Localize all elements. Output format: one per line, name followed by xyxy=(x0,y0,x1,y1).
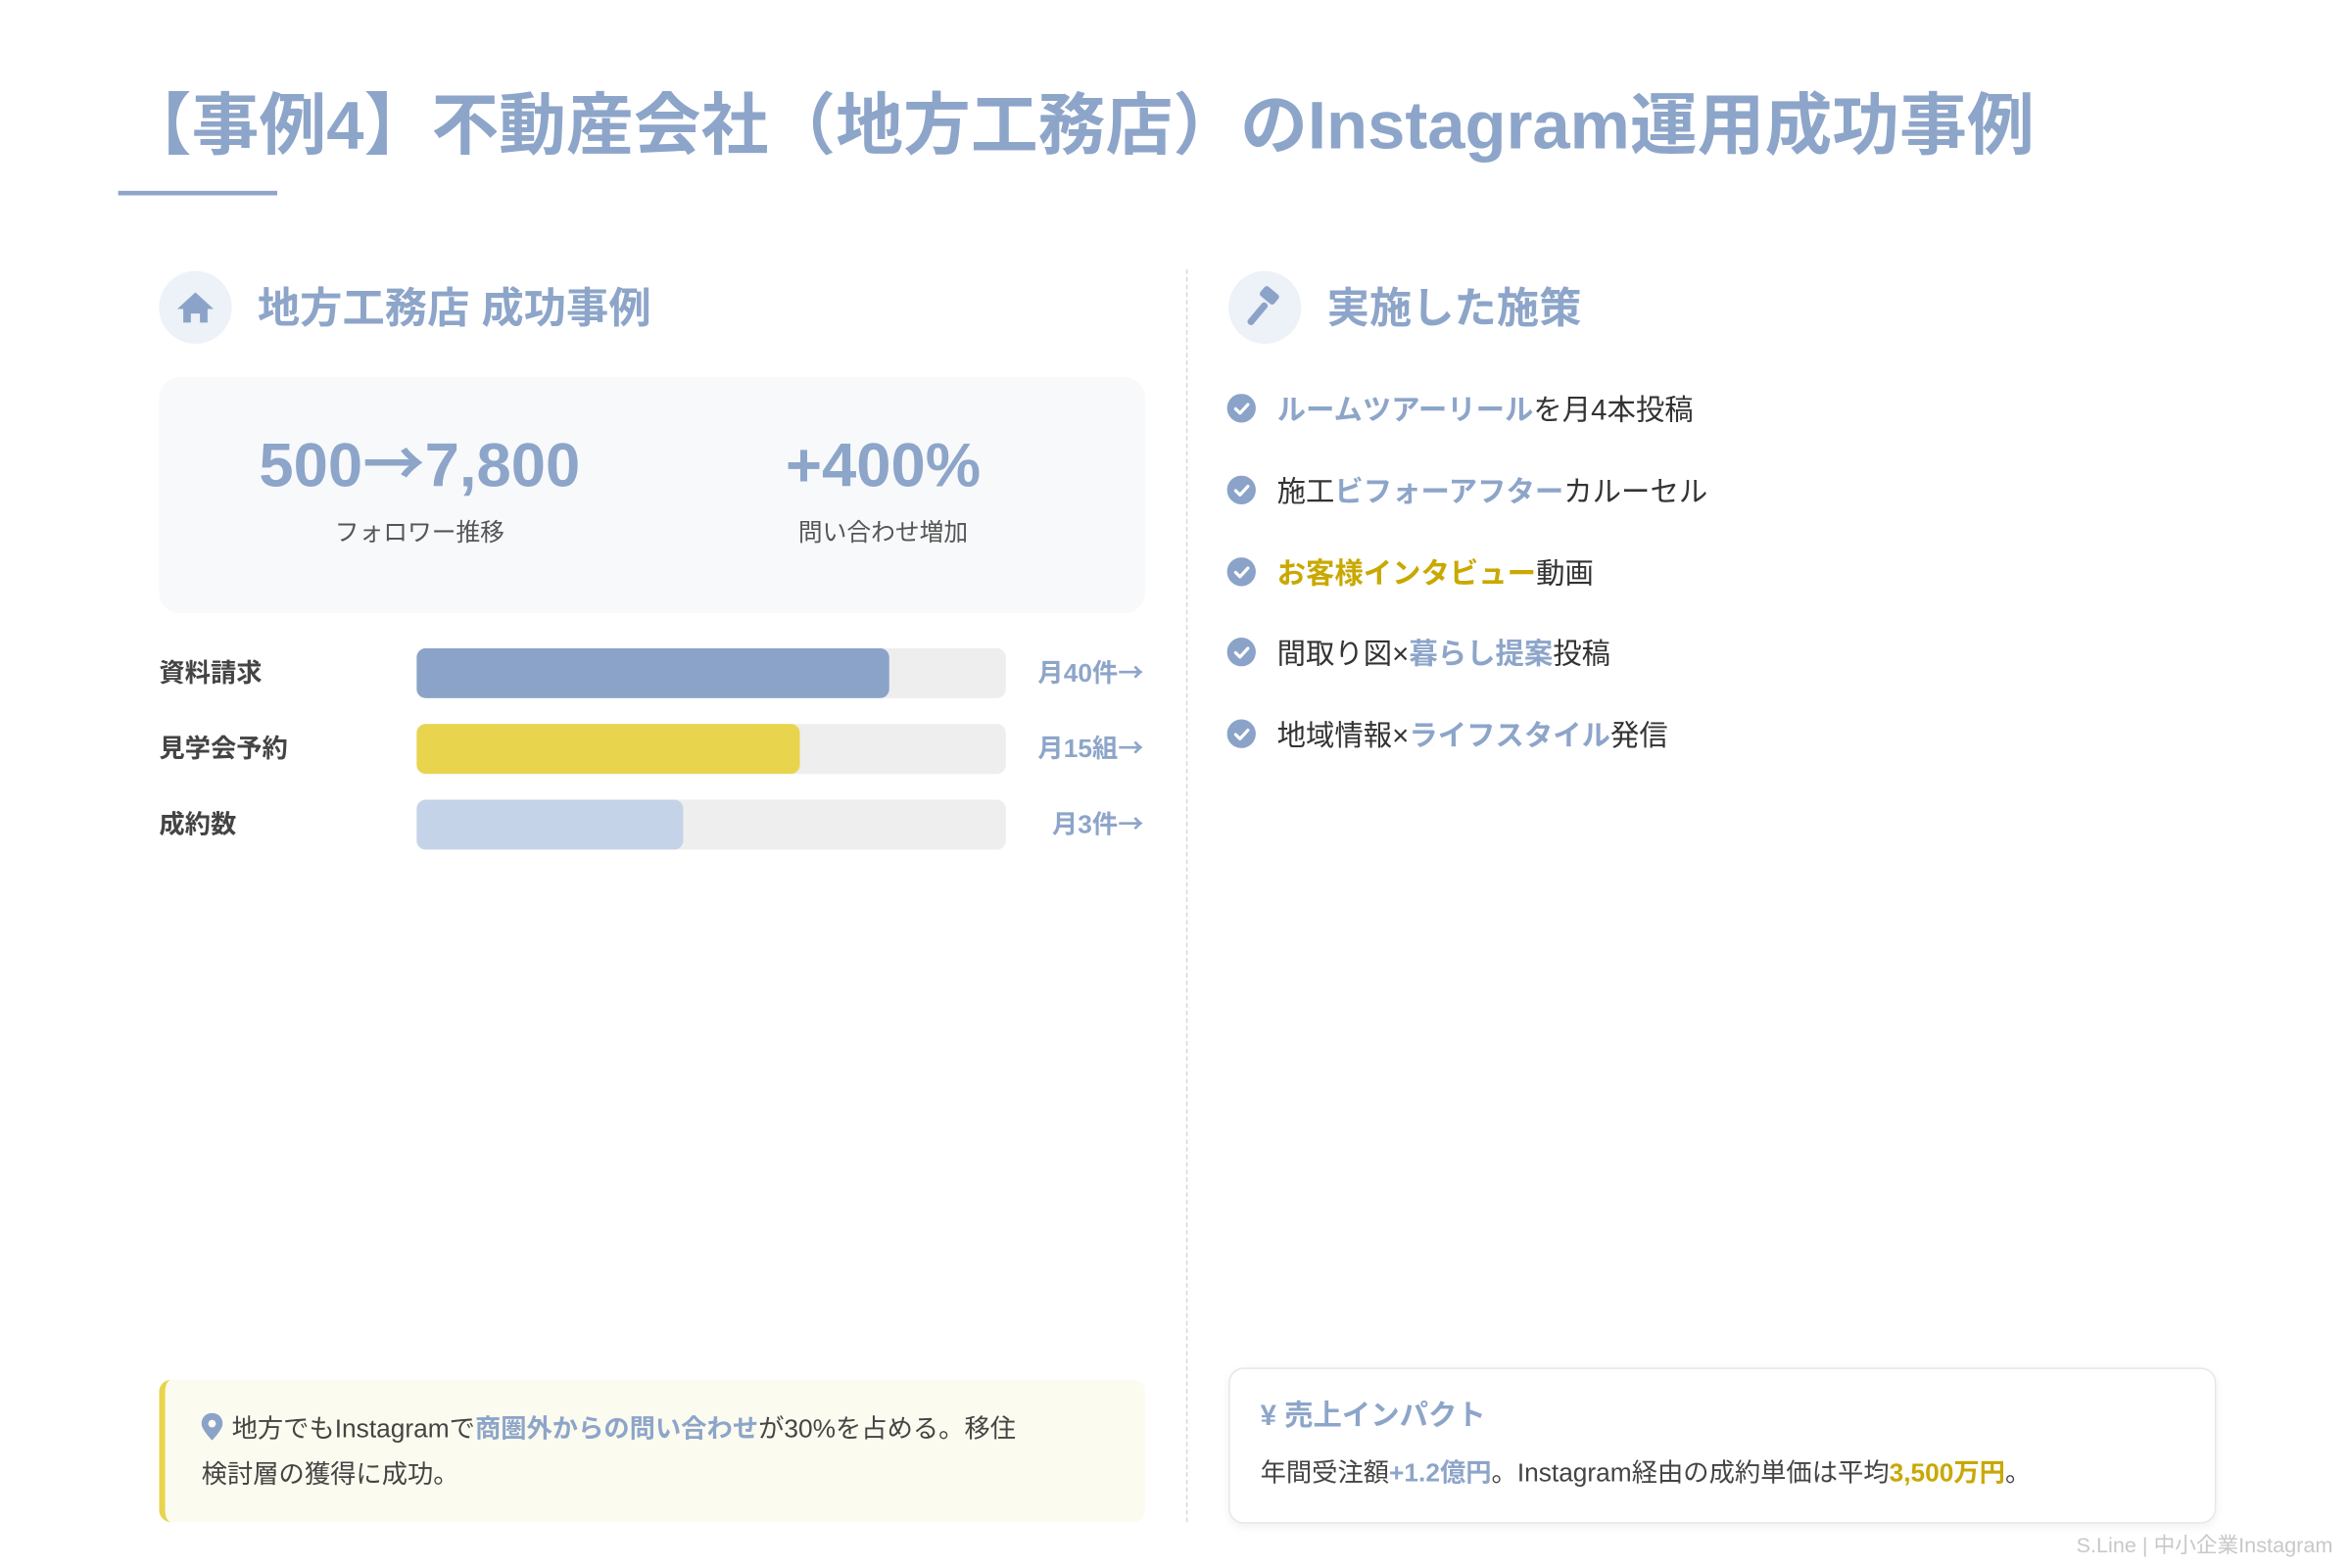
list: measures: 間取り図×暮らし提案投稿 xyxy=(1277,640,1610,671)
title: 【事例4】不動産会社（地方工務店）のInstagram運用成功事例 xyxy=(124,89,2035,164)
icon: house xyxy=(159,271,232,344)
stat: inquiries: 問い合わせ増加 xyxy=(798,521,968,546)
callout: regional note xyxy=(159,1380,1145,1522)
stat: inquiries xyxy=(786,430,981,546)
panel: left success case xyxy=(159,270,981,546)
bar chart: 資料請求 xyxy=(159,659,263,688)
heading: 地方工務店 成功事例 xyxy=(258,285,651,332)
list: measures: ルームツアーリールを月4本投稿 xyxy=(1277,396,1694,427)
callout: sales impact: 年間受注額+1.2億円。Instagram経由の成約単価は平均3,500万円。 xyxy=(1261,1458,2031,1488)
stat: followers: フォロワー推移 xyxy=(335,521,504,546)
title underline xyxy=(119,191,277,195)
callout: sales impact xyxy=(1228,1367,2216,1524)
bar chart xyxy=(159,648,1144,850)
heading: 実施した施策 xyxy=(1327,285,1581,332)
icon: hammer xyxy=(1228,271,1301,344)
stat: followers xyxy=(259,413,580,546)
bar chart: 見学会予約 xyxy=(159,735,288,763)
footer: S.Line | 中小企業Instagram xyxy=(2077,1533,2332,1557)
panel: measures xyxy=(1228,270,1581,344)
callout: sales impact: ¥ 売上インパクト xyxy=(1261,1401,1486,1433)
callout: regional note: 地方でもInstagramで商圏外からの問い合わせが30%を占める。移住 xyxy=(232,1414,1016,1444)
bar chart: 月40件→ xyxy=(1037,651,1144,689)
list: measures: お客様インタビュー動画 xyxy=(1277,559,1594,591)
callout: regional note: 検討層の獲得に成功。 xyxy=(202,1460,459,1489)
list: measures xyxy=(1226,394,1707,753)
list: measures: 地域情報×ライフスタイル発信 xyxy=(1277,721,1668,753)
stat: followers: 500→7,800 xyxy=(259,413,580,504)
bar chart: 成約数 xyxy=(159,810,236,839)
stats box xyxy=(159,377,1145,613)
list: measures: 施工ビフォーアフターカルーセル xyxy=(1277,477,1707,509)
bar chart: 月15組→ xyxy=(1037,727,1144,765)
bar chart: 月3件→ xyxy=(1052,803,1144,840)
stat: inquiries: +400% xyxy=(786,430,981,499)
divider xyxy=(1186,269,1187,1522)
